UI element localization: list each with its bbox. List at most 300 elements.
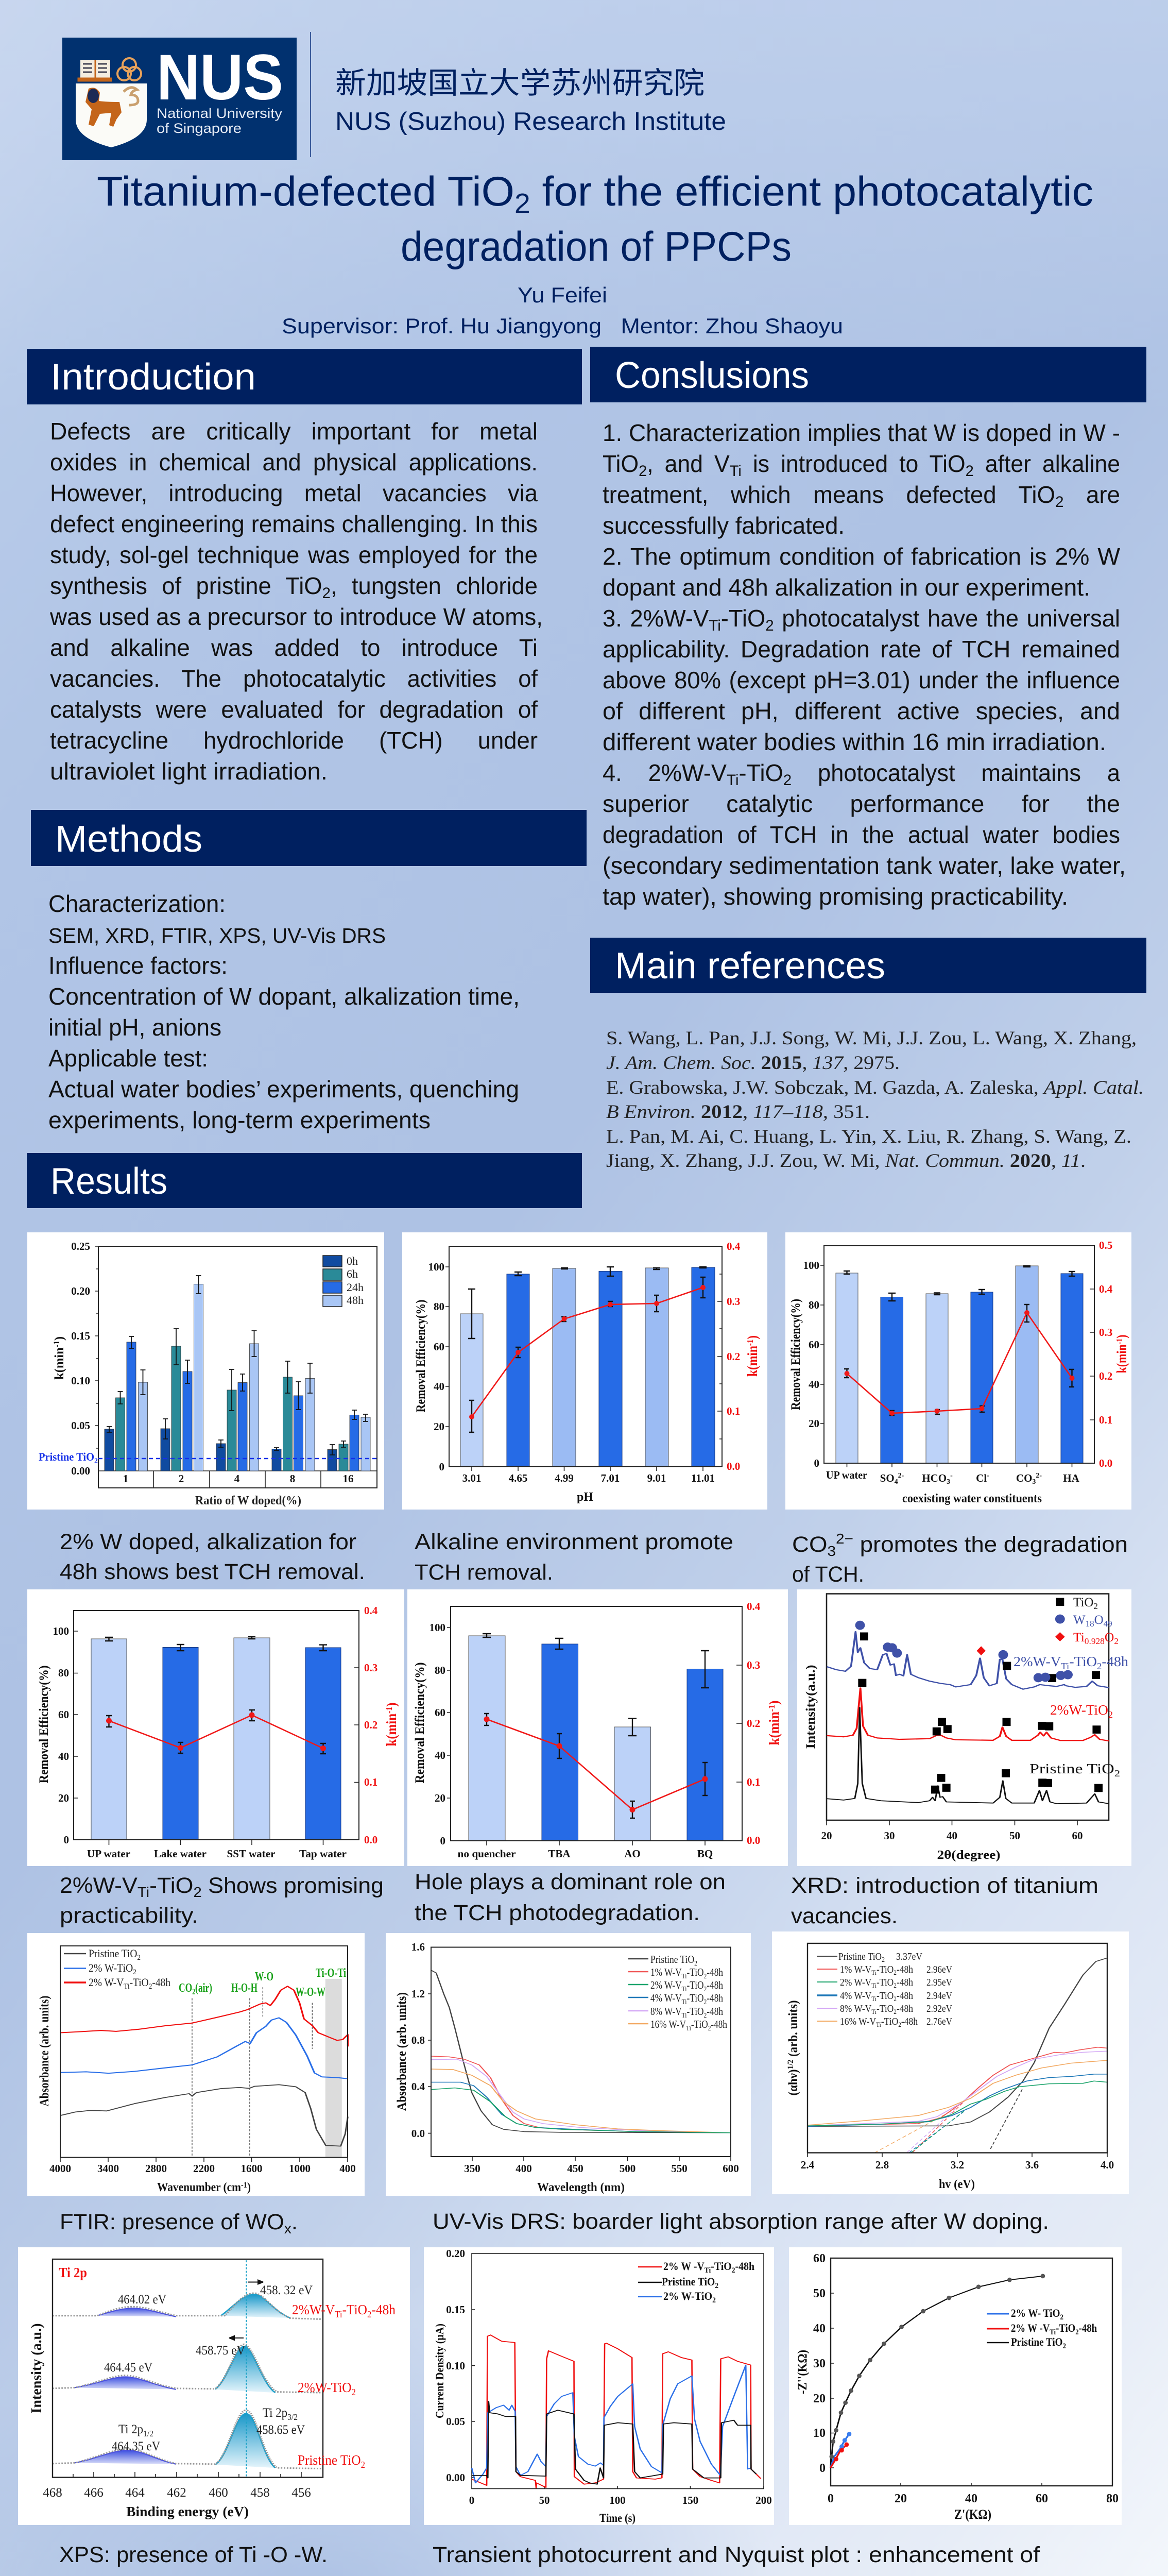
- introduction text: was used as a precursor to introduce W atoms,: [49, 603, 543, 630]
- pristine TiO2 reference line: [39, 1450, 377, 1465]
- introduction text: study, sol-gel technique was employed for the: [50, 541, 538, 568]
- chart 4 axis titles: -1: [384, 1707, 394, 1714]
- caption: W doping: 2% W doped, alkalization for: [60, 1530, 356, 1554]
- XPS tick labels: 460: [209, 2486, 228, 2500]
- XPS annotations: 464.35 eV: [112, 2439, 160, 2453]
- Nyquist tick labels: 10: [813, 2427, 826, 2440]
- chart 5 tick labels: 0: [440, 1835, 445, 1847]
- chart 1 tick labels: 0.25: [71, 1240, 90, 1252]
- Nyquist legend: 2: [1062, 2342, 1066, 2350]
- chart 3 right tick labels: 0.2: [1099, 1370, 1112, 1382]
- UV-Vis legend: -48h: [707, 1979, 723, 1991]
- XPS shift arrows: [229, 2280, 263, 2340]
- UV-Vis tick labels: 550: [671, 2162, 688, 2175]
- XPS sample labels: 2%W-V: [292, 2302, 337, 2317]
- FTIR legend: -TiO: [130, 1976, 149, 1989]
- chart 2 tick labels: 80: [434, 1300, 444, 1313]
- chart 2 tick labels: 7.01: [601, 1472, 620, 1484]
- XPS sample labels: 2: [367, 2309, 371, 2319]
- introduction text: and alkaline was added to introduce Ti: [50, 634, 538, 661]
- caption: W doping: 48h shows best TCH removal.: [60, 1560, 365, 1584]
- Tauc legend: 2: [894, 1981, 897, 1989]
- XPS annotations: 1/2: [143, 2429, 153, 2438]
- conclusions text: after alkaline: [974, 450, 1120, 477]
- XRD legend: [1073, 1596, 1119, 1646]
- chart 3 axis titles: ): [1114, 1334, 1129, 1338]
- photocurrent legend: [638, 2260, 754, 2304]
- conclusions text: superior catalytic performance for the: [603, 790, 1120, 817]
- institute name: [335, 66, 726, 135]
- chart 5 axes: [447, 1606, 742, 1845]
- caption: hole: [415, 1870, 726, 1925]
- conclusions text: dopant and 48h alkalization in our experiment.: [603, 574, 1090, 601]
- chart: quenching: [407, 1589, 788, 1866]
- chart 2 right tick labels: 0.0: [727, 1460, 740, 1472]
- chart 4 tick labels: [53, 1625, 347, 1860]
- XRD tick labels: 20: [821, 1829, 832, 1842]
- conclusions text: applicability. Degradation rate of TCH remained: [603, 636, 1120, 663]
- XRD curve labels: 2%W-TiO: [1050, 1702, 1108, 1718]
- chart 1 legend: 48h: [347, 1294, 364, 1307]
- chart: water bodies: [27, 1589, 404, 1866]
- chart 4 tick labels: 0: [64, 1834, 69, 1846]
- panel: main references: [590, 938, 1146, 1172]
- conclusions text: tap water), showing promising practicability.: [603, 883, 1068, 910]
- caption: water bodies: Ti: [138, 1884, 149, 1900]
- chart 2 tick labels: 4.99: [555, 1472, 574, 1484]
- Nyquist legend: 2% W -V: [1011, 2321, 1056, 2334]
- photocurrent tick labels: 200: [755, 2494, 772, 2506]
- chart 3 right tick labels: 0.0: [1099, 1457, 1112, 1469]
- XPS tick labels: 466: [84, 2486, 104, 2500]
- photocurrent legend: 2% W -V: [663, 2260, 709, 2273]
- UV-Vis legend: -48h: [707, 1992, 723, 2004]
- XPS annotations: Ti 2p: [118, 2422, 146, 2436]
- conclusions text: Ti: [727, 772, 739, 789]
- XRD legend: O: [1105, 1631, 1114, 1645]
- panel: introduction: [27, 349, 582, 785]
- UV-Vis legend: Pristine TiO: [650, 1953, 703, 1965]
- chart 2 error bars: [468, 1267, 707, 1432]
- chart 2 tick labels: 40: [434, 1380, 444, 1393]
- chart 3 tick labels: 2-: [898, 1472, 904, 1480]
- Tauc axis titles: (arb. units): [786, 2000, 800, 2060]
- Nyquist frame: [831, 2258, 1112, 2486]
- caption: alkaline environment: TCH removal.: [415, 1560, 553, 1585]
- FTIR band labels: 2: [192, 1988, 195, 1996]
- FTIR axis titles: ): [247, 2181, 251, 2194]
- chart 3 tick labels: 40: [809, 1378, 819, 1391]
- photocurrent legend: 2% W-TiO: [663, 2290, 717, 2302]
- icon: three rings: [117, 58, 141, 80]
- photocurrent legend: 2: [732, 2266, 735, 2275]
- XPS annotations: 3/2: [287, 2412, 298, 2422]
- chart 5 tick labels: AO: [624, 1848, 641, 1860]
- title: degradation of PPCPs: [401, 224, 792, 270]
- FTIR legend: Ti: [124, 1982, 130, 1991]
- chart 2 axis titles: ): [745, 1335, 760, 1340]
- chart 1 tick labels: 8: [290, 1472, 295, 1485]
- Nyquist axis titles: [796, 2350, 991, 2522]
- UV-Vis tick labels: [411, 1941, 739, 2175]
- chart 3 axis titles: Removal Efficiency(%): [789, 1299, 803, 1410]
- introduction text: vacancies. The photocatalytic activities of: [50, 665, 538, 692]
- reference list: Jiang, X. Zhang, J.J. Zou, W. Mi, Nat. Commun. 2020, 11.: [606, 1150, 1086, 1172]
- reference list: J. Am. Chem. Soc. 2015, 137, 2975.: [606, 1053, 900, 1074]
- XPS annotations: 464.45 eV: [104, 2361, 152, 2375]
- Tauc axis titles: 1/2: [786, 2060, 795, 2069]
- Nyquist tick labels: 30: [813, 2357, 826, 2370]
- UV-Vis legend: -TiO: [687, 1966, 704, 1978]
- Nyquist legend: 2: [1075, 2328, 1079, 2336]
- XRD axis titles: [804, 1665, 1000, 1862]
- Nyquist tick labels: 0: [828, 2492, 834, 2505]
- conclusions text: different water bodies within 16 min irradiation.: [603, 728, 1106, 755]
- photocurrent legend: Pristine TiO: [662, 2275, 722, 2288]
- chart 3 axis titles: k(min: [1114, 1337, 1129, 1374]
- Tauc axis titles: hv (eV): [939, 2178, 975, 2191]
- Nyquist axis titles: Z'(KΩ): [954, 2507, 991, 2522]
- UV-Vis legend: -TiO: [687, 1979, 704, 1991]
- chart 2 axis titles: Removal Efficiency(%): [414, 1299, 428, 1413]
- photocurrent tick labels: 0.10: [446, 2360, 465, 2372]
- chart 4 tick labels: 60: [58, 1708, 69, 1721]
- conclusions text: [603, 419, 1126, 910]
- photocurrent legend: 2: [715, 2282, 718, 2290]
- methods text: Applicable test:: [48, 1045, 208, 1072]
- FTIR legend: 2: [133, 1968, 136, 1976]
- chart 1 tick labels: 0.20: [71, 1285, 90, 1297]
- conclusions text: degradation of TCH in the actual water bodies: [603, 821, 1120, 848]
- introduction text: However, introducing metal vacancies via: [50, 480, 538, 506]
- XPS sample labels: -TiO: [342, 2302, 367, 2317]
- FTIR axis titles: Wavenumber (cm: [157, 2181, 251, 2194]
- XPS annotations: [104, 2283, 313, 2453]
- chart 2 right tick labels: 0.1: [727, 1405, 740, 1417]
- chart 3 tick labels: -: [950, 1472, 953, 1480]
- chart 3 axes: [820, 1246, 1094, 1467]
- UV-Vis tick labels: 0.0: [411, 2127, 425, 2140]
- Tauc tick labels: 3.6: [1025, 2159, 1039, 2171]
- FTIR frame: [60, 1946, 348, 2162]
- chart 5 right tick labels: 0.1: [747, 1776, 760, 1788]
- FTIR legend: 2% W-V: [89, 1976, 128, 1989]
- methods text: Characterization:: [48, 890, 226, 917]
- XPS sample labels: 2%W-TiO: [298, 2380, 355, 2395]
- caption: water bodies: -TiO: [149, 1873, 193, 1898]
- chart 5 error bars: [483, 1634, 709, 1818]
- conclusions text: 2: [966, 463, 974, 480]
- reference list: B Environ. 2012, 117–118 , 351.: [606, 1101, 870, 1123]
- photocurrent curves: [472, 2335, 761, 2488]
- UV-Vis legend: 2: [704, 1998, 707, 2006]
- photocurrent legend: -48h: [735, 2260, 754, 2273]
- FTIR band labels: Ti-O-Ti: [316, 1967, 346, 1980]
- FTIR band labels: [179, 1967, 346, 1999]
- chart 4 tick labels: SST water: [227, 1848, 275, 1860]
- chart: transient photocurrent: [424, 2247, 774, 2525]
- XPS sample labels: Ti 2p: [59, 2265, 87, 2280]
- XRD legend: 0.928: [1085, 1636, 1105, 1646]
- chart 3 tick labels: HA: [1063, 1472, 1080, 1484]
- chart 2 axis titles: [414, 1299, 760, 1504]
- chart 3 tick labels: 3: [1032, 1478, 1036, 1486]
- UV-Vis legend: Ti: [682, 1998, 687, 2006]
- XRD curve labels: -TiO: [1069, 1654, 1097, 1669]
- chart 3 tick labels: 3: [947, 1478, 950, 1486]
- chart: UV-Vis DRS: [386, 1933, 751, 2196]
- UV-Vis legend: 2: [708, 2025, 711, 2032]
- photocurrent tick labels: 0.05: [446, 2415, 465, 2428]
- methods text: SEM, XRD, FTIR, XPS, UV-Vis DRS: [48, 924, 386, 947]
- caption: FTIR: FTIR: presence of WO: [60, 2210, 281, 2234]
- XRD tick labels: 30: [884, 1829, 895, 1842]
- XPS frame: [53, 2259, 323, 2478]
- UV-Vis legend: 2% W-V: [650, 1979, 689, 1991]
- Tauc legend: 2: [894, 2008, 897, 2015]
- chart 5 axis titles: ): [766, 1700, 782, 1705]
- UV-Vis axis titles: Wavelength (nm): [537, 2181, 625, 2194]
- chart 3 right tick labels: 0.4: [1099, 1283, 1113, 1295]
- chart 5 tick labels: BQ: [697, 1848, 713, 1860]
- XRD legend: 49: [1104, 1619, 1112, 1629]
- XRD legend: 18: [1086, 1619, 1094, 1629]
- chart 5 axis titles: k(min: [766, 1709, 782, 1745]
- logo subtitle: of Singapore: [157, 121, 242, 136]
- chart 1 axis titles: [53, 1336, 301, 1507]
- UV-Vis legend: Ti: [686, 2025, 691, 2032]
- chart 1 axis titles: k(min: [53, 1347, 66, 1380]
- UV-Vis tick labels: 1.2: [411, 1988, 425, 2000]
- chart 5 tick labels: 60: [435, 1706, 445, 1719]
- UV-Vis tick labels: 1.6: [411, 1941, 425, 1953]
- FTIR tick labels: 1600: [241, 2162, 263, 2175]
- XRD curve labels: Ti: [1061, 1661, 1069, 1671]
- conclusions text: photocatalyst maintains a: [792, 759, 1120, 786]
- photocurrent tick labels: 100: [609, 2494, 626, 2506]
- XRD curve labels: 2: [1114, 1768, 1120, 1778]
- XRD tick labels: 50: [1009, 1829, 1020, 1842]
- chart 1 error bars: [107, 1276, 368, 1455]
- XPS sample labels: 2: [361, 2460, 365, 2470]
- XRD curve labels: Pristine TiO: [1029, 1761, 1097, 1776]
- caption: water bodies: practicability.: [60, 1903, 198, 1928]
- chart 4 tick labels: 40: [58, 1750, 69, 1762]
- conclusions text: TiO: [603, 450, 640, 477]
- methods text: experiments, long-term experiments: [48, 1107, 431, 1133]
- chart 3 tick labels: 60: [809, 1338, 819, 1351]
- UV-Vis legend: Ti: [682, 2012, 687, 2020]
- chart 3 axis titles: coexisting water constituents: [902, 1492, 1042, 1505]
- methods text: Influence factors:: [48, 952, 228, 979]
- chart 4 bars: [91, 1638, 341, 1840]
- panel: methods: [31, 810, 587, 1133]
- chart 4 right tick labels: 0.2: [364, 1719, 377, 1731]
- reference list: S. Wang, L. Pan, J.J. Song, W. Mi, J.J. Zou, L. Wang, X. Zhang,: [606, 1028, 1137, 1049]
- photocurrent frame: [472, 2253, 764, 2489]
- conclusions text: Ti: [730, 463, 742, 480]
- Tauc legend: Ti: [876, 2021, 881, 2028]
- Tauc legend: Pristine TiO: [838, 1951, 888, 1962]
- Nyquist legend: Ti: [1050, 2328, 1056, 2336]
- chart: coexisting water constituents: [785, 1232, 1131, 1510]
- chart 4 axis titles: Removal Efficiency(%): [37, 1665, 51, 1784]
- caption: alkaline environment: [415, 1530, 733, 1585]
- caption: carbonate: promotes the degradation: [853, 1532, 1128, 1557]
- chart 5 axis titles: Removal Efficiency(%): [413, 1662, 427, 1784]
- XRD curve labels: 2: [1108, 1709, 1113, 1720]
- methods text: Concentration of W dopant, alkalization time,: [48, 983, 520, 1010]
- Tauc legend: -TiO: [877, 1964, 894, 1975]
- UV-Vis legend: Ti: [682, 1986, 687, 1993]
- chart 4 axis titles: ): [384, 1702, 399, 1707]
- Tauc legend: 2% W-V: [840, 1977, 876, 1988]
- Tauc legend: -48h: [897, 1964, 913, 1975]
- conclusions text: (secondary sedimentation tank water, lake water,: [603, 852, 1126, 879]
- chart 2 bars: [460, 1267, 715, 1466]
- XPS tick labels: 462: [167, 2486, 186, 2500]
- XPS sample labels: -48h: [371, 2302, 396, 2317]
- caption: alkaline environment: Alkaline environment promote: [415, 1530, 733, 1554]
- chart 2 axis titles: -1: [745, 1340, 755, 1346]
- UV-Vis tick labels: 600: [723, 2162, 739, 2175]
- XPS tick labels: [43, 2486, 311, 2500]
- UV-Vis legend: 2: [704, 2012, 707, 2020]
- introduction text: Defects are critically important for metal: [50, 418, 538, 445]
- FTIR legend: -48h: [152, 1976, 170, 1989]
- Tauc legend: [817, 1951, 952, 2028]
- caption: carbonate: 2−: [836, 1531, 853, 1547]
- Tauc legend: -TiO: [877, 2003, 894, 2014]
- chart 1 legend: [323, 1255, 364, 1307]
- FTIR legend: 2: [137, 1954, 141, 1962]
- XPS annotations: 458. 32 eV: [260, 2283, 313, 2297]
- caption: carbonate: CO: [792, 1532, 825, 1557]
- chart 5 tick labels: 100: [430, 1621, 445, 1634]
- conclusions text: treatment, which means defected TiO: [603, 481, 1059, 508]
- caption: carbonate: 3: [827, 1543, 836, 1559]
- FTIR tick labels: [49, 2162, 356, 2175]
- heading: conclusions: Conslusions: [615, 355, 809, 396]
- Tauc legend: Ti: [871, 2008, 877, 2015]
- chart 2 right tick labels: [727, 1240, 741, 1472]
- FTIR band labels: (air): [195, 1981, 212, 1995]
- caption: photocurrent and Nyquist: Transient photocurrent and Nyquist plot : enhancement of: [433, 2543, 1040, 2567]
- Tauc legend: -48h: [901, 2016, 918, 2027]
- introduction text: ultraviolet light irradiation.: [50, 758, 328, 785]
- chart 2 rate line: [469, 1285, 706, 1419]
- Nyquist legend: -TiO: [1056, 2321, 1075, 2334]
- Tauc legend: -TiO: [881, 2016, 898, 2027]
- Tauc legend: 2: [898, 2021, 901, 2028]
- Tauc legend: 2.96eV: [926, 1964, 952, 1975]
- chart 3 error bars: [844, 1266, 1075, 1415]
- chart 5 right tick labels: 0.3: [747, 1659, 760, 1671]
- Nyquist tick labels: [813, 2252, 1119, 2505]
- Tauc legend: Ti: [871, 1969, 877, 1976]
- chart 3 tick labels: [803, 1259, 1080, 1486]
- chart 4 error bars: [105, 1636, 327, 1754]
- heading: results: Results: [50, 1161, 167, 1202]
- FTIR legend: [64, 1947, 170, 1991]
- Tauc legend: -48h: [897, 1990, 913, 2002]
- caption: XRD: [791, 1873, 1098, 1928]
- Tauc legend: Ti: [871, 1995, 877, 2003]
- Nyquist tick labels: 20: [895, 2492, 907, 2505]
- chart 3 tick labels: HCO: [922, 1472, 947, 1484]
- Nyquist legend: Pristine TiO: [1011, 2335, 1071, 2348]
- FTIR band labels: CO: [179, 1981, 197, 1995]
- XPS tick labels: 458: [250, 2486, 270, 2500]
- XPS axis titles: Intensity (a.u.): [29, 2324, 45, 2413]
- Nyquist tick labels: 60: [1036, 2492, 1048, 2505]
- Tauc legend: 4% W-V: [840, 1990, 876, 2002]
- chart 5 right tick labels: 0.4: [747, 1600, 761, 1613]
- chart: XRD: [797, 1589, 1131, 1866]
- UV-Vis tick labels: 400: [516, 2162, 532, 2175]
- reference list: L. Pan, M. Ai, C. Huang, L. Yin, X. Liu, R. Zhang, S. Wang, Z.: [606, 1126, 1131, 1147]
- title: for the efficient photocatalytic: [530, 168, 1093, 215]
- conclusions text: successfully fabricated.: [603, 512, 845, 539]
- FTIR tick labels: 1000: [289, 2162, 311, 2175]
- conclusions text: are: [1064, 481, 1120, 508]
- Tauc legend: 2.95eV: [926, 1977, 952, 1988]
- UV-Vis legend: [628, 1953, 727, 2032]
- FTIR axis titles: Absorbance (arb. units): [38, 1996, 51, 2106]
- UV-Vis tick labels: 0.4: [411, 2080, 425, 2093]
- chart 5 axis titles: [413, 1662, 782, 1784]
- UV-Vis axis titles: [395, 1992, 625, 2194]
- XRD curves: [827, 1598, 1109, 1804]
- XRD legend: 2: [1114, 1636, 1119, 1646]
- XRD curve labels: [1014, 1654, 1129, 1778]
- XPS sample labels: Ti: [335, 2309, 342, 2319]
- XRD curve labels: 2: [1097, 1661, 1102, 1671]
- Nyquist tick labels: 80: [1106, 2492, 1119, 2505]
- caption: XRD: XRD: introduction of titanium: [791, 1873, 1098, 1898]
- chart 2 tick labels: 20: [434, 1420, 444, 1433]
- conclusions text: , and V: [647, 450, 730, 477]
- caption: UV-Vis: UV-Vis DRS: boarder light absorption range after W doping.: [433, 2209, 1049, 2234]
- chart 2 right tick labels: 0.2: [727, 1350, 740, 1363]
- UV-Vis legend: 2: [704, 1986, 707, 1993]
- XPS annotations: 458.75 eV: [196, 2344, 245, 2358]
- caption: carbonate: [792, 1531, 1128, 1587]
- photocurrent tick labels: 0.15: [446, 2303, 465, 2316]
- UV-Vis legend: 4% W-V: [650, 1992, 689, 2004]
- FTIR tick labels: 2800: [145, 2162, 167, 2175]
- authors: Supervisor: Prof. Hu Jiangyong Mentor: Zhou Shaoyu: [282, 314, 843, 338]
- photocurrent axis titles: [433, 2324, 635, 2524]
- FTIR legend: 2: [149, 1982, 152, 1991]
- UV-Vis tick labels: 450: [567, 2162, 583, 2175]
- XPS axis titles: Binding energy (eV): [126, 2504, 249, 2519]
- chart 1 axis titles: ): [53, 1336, 66, 1341]
- chart 1 tick labels: 16: [343, 1472, 353, 1485]
- introduction text: [49, 418, 543, 785]
- conclusions text: 2: [765, 617, 774, 634]
- introduction text: , tungsten chloride: [331, 572, 538, 599]
- chart 5 tick labels: 80: [435, 1664, 445, 1676]
- caption: W doping: [60, 1530, 365, 1584]
- UV-Vis legend: -TiO: [691, 2018, 708, 2030]
- chart 3 tick labels: 20: [809, 1417, 819, 1430]
- conclusions text: -TiO: [739, 759, 783, 786]
- reference list: E. Grabowska, J.W. Sobczak, M. Gazda, A. Zaleska, Appl. Catal.: [606, 1077, 1144, 1098]
- heading: conclusions: [590, 347, 1146, 402]
- logo subtitle: National University: [157, 106, 283, 121]
- chart 1 axis titles: -1: [53, 1341, 61, 1347]
